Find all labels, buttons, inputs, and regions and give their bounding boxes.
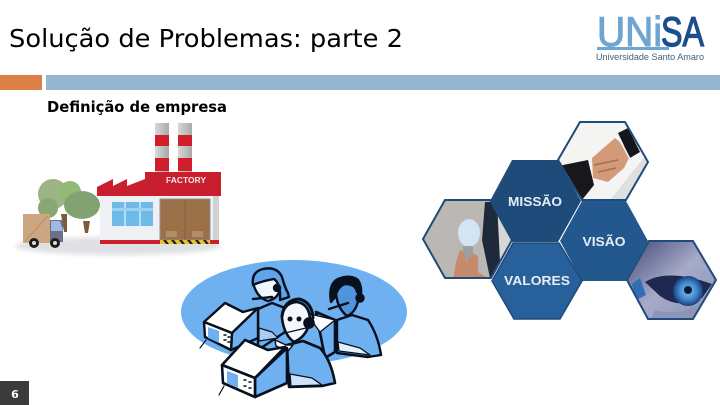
left printer terminal [200,303,258,350]
hexagon: missão [490,160,581,242]
logo wordmark [597,8,704,55]
hexagon: missão: MISSÃO [508,194,562,209]
hexagon: valores [492,243,582,319]
factory wall [100,196,219,244]
hexagon: light bulb photo [420,198,515,280]
logo: UNiSA [596,8,704,63]
page number: 6 [11,388,19,401]
hexagon: eye photo [625,240,718,322]
hexagon: valores: VALORES [504,273,570,288]
trees [38,179,100,233]
factory sign: FACTORY [166,176,207,185]
illustration: factory [15,123,221,255]
chimneys [155,123,192,173]
illustration: call center [181,260,407,397]
front attendant [275,299,335,387]
right attendant [329,277,381,357]
logo tagline: Universidade Santo Amaro [596,52,704,63]
logo underline [597,47,669,50]
red base [100,240,219,244]
front printer terminal [219,340,287,397]
hazard stripes [160,240,210,244]
header bar: blue [46,75,720,90]
title: Solução de Problemas: parte 2 [9,24,403,53]
hexagon: handshake photo [555,120,650,202]
hexagon: visão [560,201,648,281]
factory roof [97,172,221,196]
hexagon: visão: VISÃO [582,234,626,249]
logo wordmark: SA [661,8,704,55]
page number [0,381,29,405]
loading door [160,199,210,240]
ground shadow [15,237,221,255]
hexagon diagram [420,120,718,322]
blue ellipse background [181,260,407,364]
logo wordmark: UNi [597,8,662,55]
factory window [112,202,153,226]
header bar: orange [0,75,42,90]
subtitle: Definição de empresa [47,98,227,116]
delivery truck [23,214,63,248]
back-left attendant [253,268,289,350]
